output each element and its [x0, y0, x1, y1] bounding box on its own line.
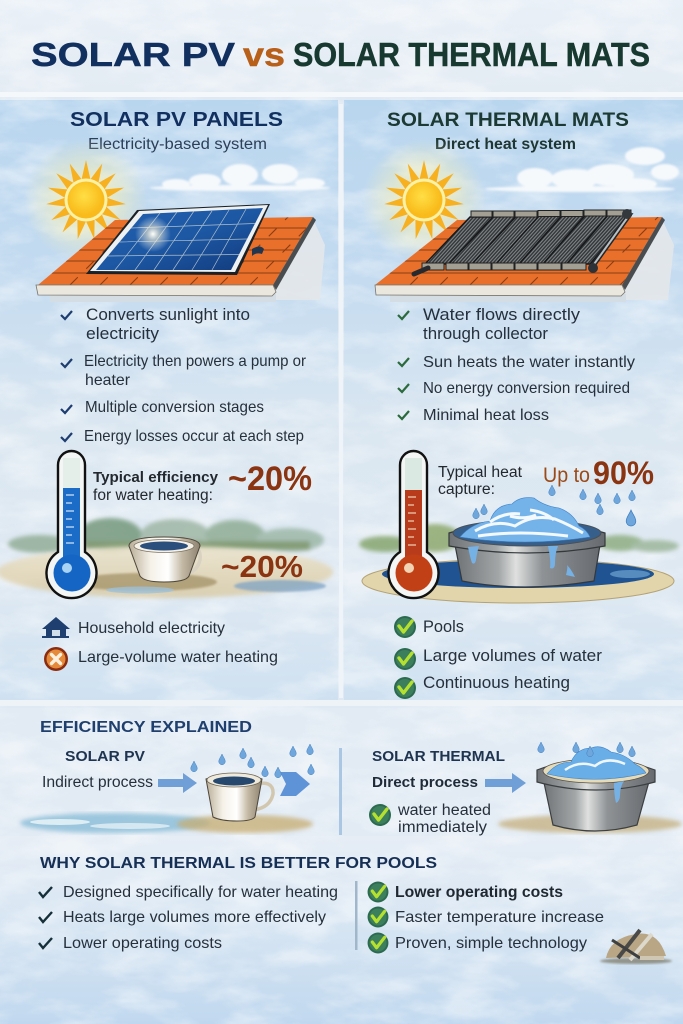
section: why solar thermal is better [39, 855, 672, 964]
arrow: indirect [158, 773, 197, 793]
title: SOLAR THERMAL MATS [293, 36, 650, 73]
text: typical heat capture: Typical heat [438, 464, 523, 481]
list: PV process: electricity [86, 325, 160, 343]
icon: house [42, 617, 70, 638]
icon: blue thermometer [46, 451, 96, 598]
icon: solar panel [86, 204, 270, 275]
icon: cross badge [44, 647, 68, 671]
scene: trees and pool [359, 524, 679, 603]
icon: coffee cup [206, 773, 273, 821]
subheading: direct heat system: Direct heat system [435, 136, 576, 153]
arrow: direct [485, 773, 526, 793]
icon: water droplets [473, 485, 636, 526]
list: benefits right [368, 882, 604, 953]
stat: up to 90%: 90% [593, 455, 654, 491]
suitability list: PV: Large-volume water heating [78, 649, 278, 666]
icon: water bucket [537, 742, 655, 831]
list: benefits right: Proven, simple technology [395, 935, 587, 952]
text: typical efficiency [93, 469, 219, 504]
list: thermal process: through collector [423, 325, 549, 343]
list: PV process: Converts sunlight into [86, 306, 250, 324]
suitability list: PV [42, 617, 278, 671]
list: thermal process: Minimal heat loss [423, 407, 549, 424]
heading: solar thermal mats: SOLAR THERMAL MATS [387, 110, 629, 131]
icon: red thermometer [389, 451, 439, 598]
heading: solar PV panels: SOLAR PV PANELS [70, 109, 283, 131]
panel: solar thermal mats [359, 110, 683, 699]
icon: sun [362, 138, 486, 262]
list: thermal process: No energy conversion required [423, 380, 630, 397]
list: thermal process [398, 306, 635, 424]
heading: efficiency explained: EFFICIENCY EXPLAINED [40, 719, 252, 736]
list: thermal process: Water flows directly [423, 306, 581, 324]
list: PV process: Electricity then powers a pump or [84, 353, 307, 370]
list: PV process: heater [85, 372, 131, 389]
list: benefits left: Lower operating costs [63, 935, 222, 952]
text: typical efficiency: Typical efficiency [93, 469, 219, 486]
heading: why solar thermal: WHY SOLAR THERMAL IS BETTER FOR POOLS [40, 855, 437, 872]
icon: coffee cup [129, 537, 200, 582]
suitability list: thermal: Pools [423, 618, 464, 636]
icon: water tub [449, 498, 605, 587]
section: efficiency explained [20, 719, 682, 836]
list: PV process: Multiple conversion stages [85, 399, 264, 416]
stat: up to 90% [543, 455, 654, 491]
roof and house [36, 217, 325, 302]
stat: ~20% efficiency: ~20% [228, 460, 312, 498]
icon: diamond arrow [280, 772, 310, 796]
title [31, 36, 650, 73]
list: benefits left: Heats large volumes more effectively [63, 909, 326, 926]
divider [339, 748, 342, 835]
list: benefits right: Faster temperature increase [395, 909, 604, 926]
suitability list: thermal: Large volumes of water [423, 647, 603, 665]
suitability list: PV: Household electricity [78, 620, 225, 637]
list: benefits left [39, 884, 338, 952]
sub-panel: solar thermal process [369, 742, 682, 836]
title: SOLAR PV [31, 36, 235, 73]
sub-panel: solar thermal process: immediately [398, 819, 487, 836]
sub-panel: solar thermal process: Direct process [372, 774, 478, 791]
badge: check [369, 804, 391, 826]
icon: droplets [191, 744, 314, 778]
icon: sun [24, 138, 148, 262]
icon: clouds [485, 147, 679, 192]
sub-panel: solar thermal process: water heated [397, 802, 491, 819]
list: thermal process: Sun heats the water instantly [423, 354, 635, 371]
icon: clouds [150, 164, 330, 191]
sub-panel: solar PV process: Indirect process [42, 774, 153, 791]
title: vs [243, 36, 285, 73]
list: PV process [61, 306, 307, 445]
ground [498, 815, 682, 833]
list: PV process: Energy losses occur at each step [84, 428, 304, 445]
icon: thermal mat collector [414, 209, 632, 274]
roof and house [360, 215, 683, 302]
sub-panel: solar PV process: SOLAR PV [65, 749, 145, 765]
stat: ~20% cup label: ~20% [221, 549, 303, 584]
suitability list: thermal [394, 616, 603, 699]
panel: solar PV panels [0, 109, 350, 671]
divider [355, 881, 358, 950]
text: typical heat capture: capture: [438, 481, 495, 498]
text: typical efficiency: for water heating: [93, 487, 213, 504]
list: benefits right: Lower operating costs [395, 884, 563, 901]
list: benefits left: Designed specifically for water heating [63, 884, 338, 901]
suitability list: thermal: Continuous heating [423, 674, 570, 692]
icon: tools and sand pile [600, 930, 672, 964]
text: typical heat capture [438, 464, 523, 498]
sub-panel: solar thermal process: SOLAR THERMAL [372, 749, 505, 765]
ground water [20, 813, 313, 833]
scene: trees and ground [0, 518, 333, 598]
stat: up to 90%: Up to [543, 464, 590, 487]
sub-panel: solar PV process [20, 744, 314, 833]
subheading: electricity-based system: Electricity-based system [88, 136, 267, 153]
